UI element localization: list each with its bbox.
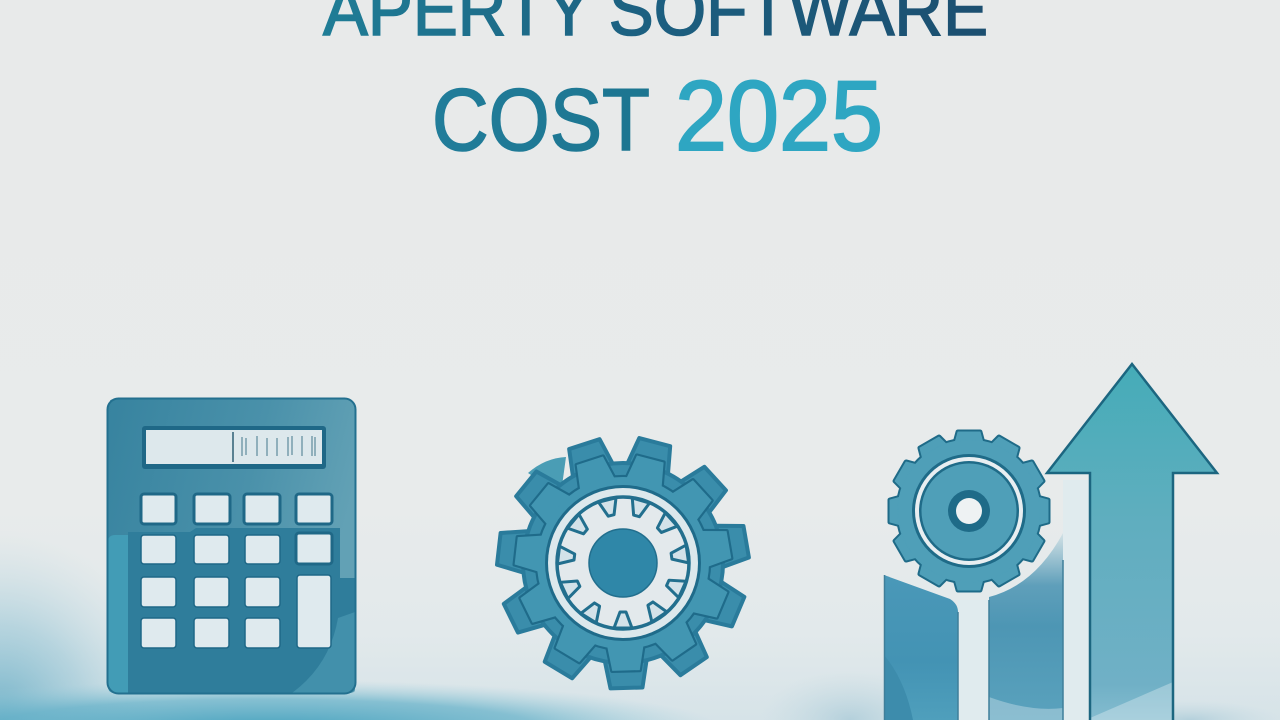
gear inner notches bbox=[557, 498, 689, 628]
bar: middle bbox=[989, 533, 1063, 720]
title line: COST 2025: 2025 bbox=[675, 60, 883, 171]
bar: left bbox=[884, 575, 958, 720]
calculator keys bbox=[141, 494, 332, 648]
icon: growth chart with arrow and gear bbox=[884, 364, 1217, 720]
gear hub bbox=[589, 529, 657, 597]
gear highlight blob bbox=[528, 457, 566, 486]
gear inner ring bbox=[545, 485, 701, 641]
growth arrow bbox=[1047, 364, 1217, 720]
gear body bbox=[496, 437, 750, 689]
title line: COST 2025 bbox=[432, 60, 883, 171]
calculator body bbox=[107, 398, 356, 694]
small gear bbox=[890, 432, 1048, 590]
icon: large gear bbox=[496, 437, 750, 689]
pale band behind bars bbox=[958, 480, 1090, 720]
icon: calculator bbox=[107, 398, 356, 694]
calculator display bbox=[142, 426, 326, 469]
title bbox=[323, 0, 988, 171]
title line: COST 2025: COST bbox=[432, 70, 650, 169]
